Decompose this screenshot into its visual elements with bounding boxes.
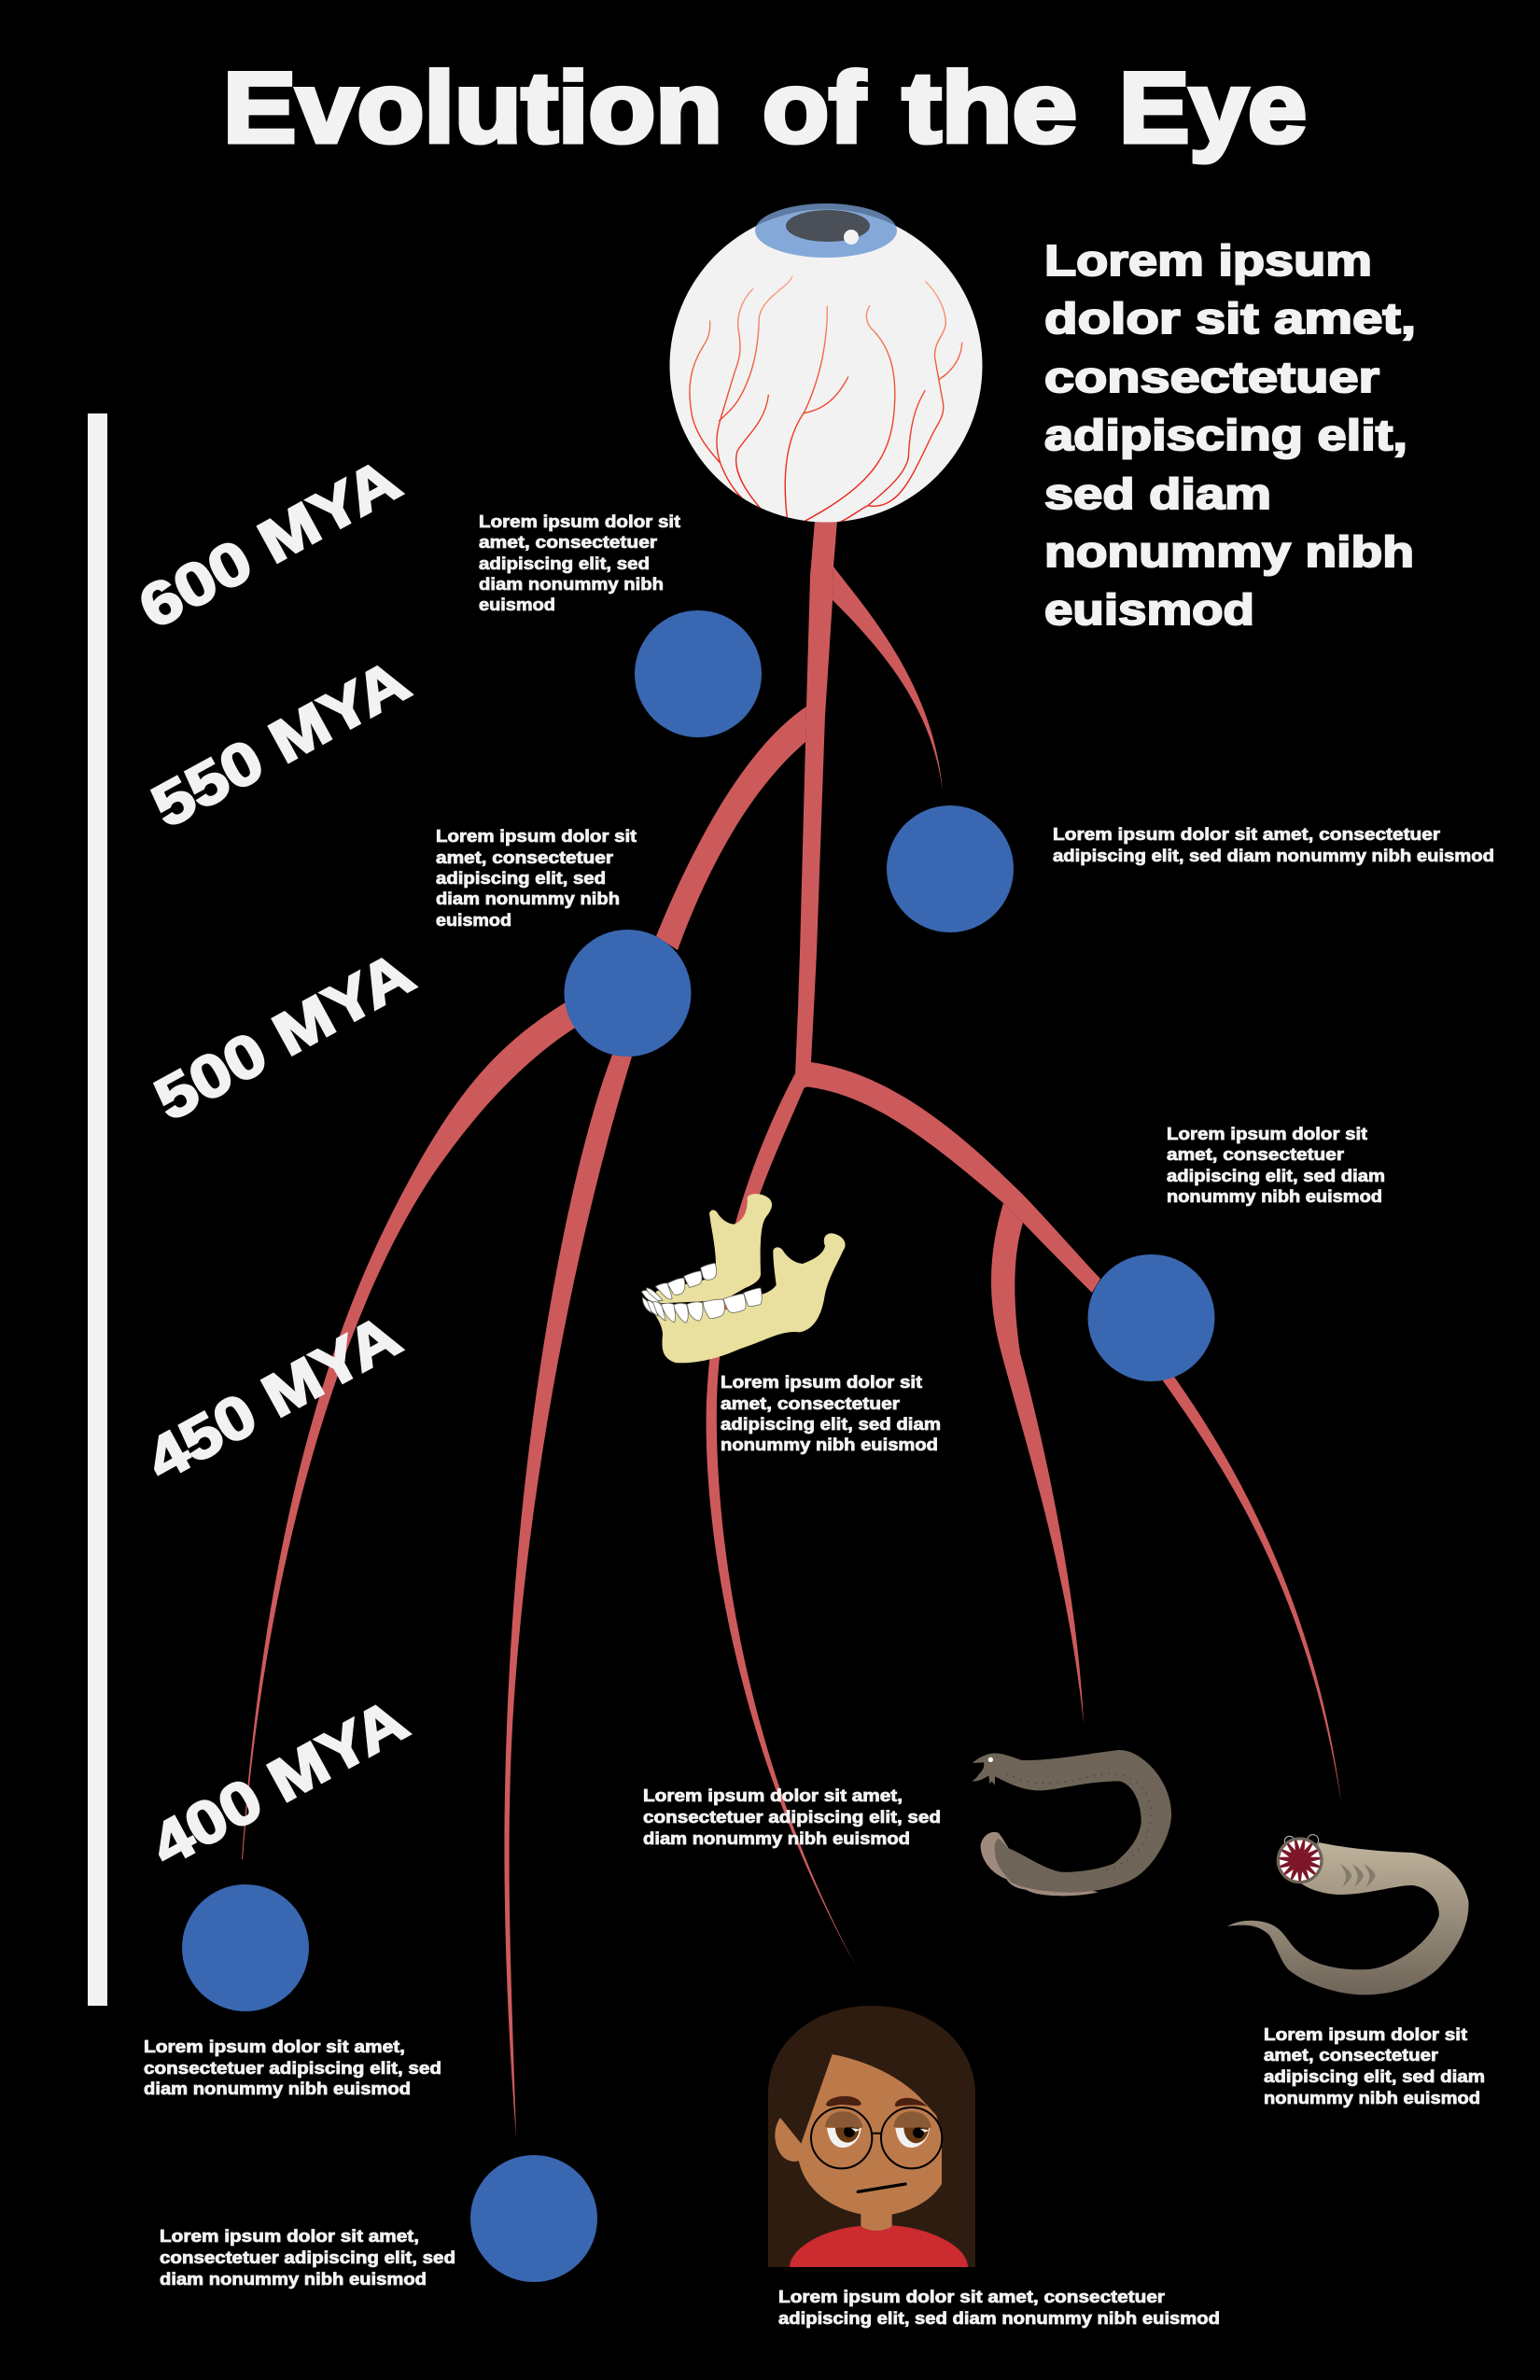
large description text: dolor sit amet, bbox=[1044, 294, 1416, 343]
branch: right limb bbox=[804, 1062, 1100, 1293]
text block: right node: adipiscing elit, sed diam bbox=[1167, 1166, 1385, 1185]
phylogenetic tree branches bbox=[242, 521, 1341, 2137]
upper jaw bbox=[653, 1194, 772, 1304]
text block: jaw: adipiscing elit, sed diam bbox=[721, 1414, 941, 1434]
text block: middle node: amet, consectetuer bbox=[436, 847, 613, 867]
text block: upper right node: Lorem ipsum dolor sit amet, consectetuer bbox=[1053, 824, 1440, 844]
title: of bbox=[763, 51, 865, 163]
hagfish slime pores bbox=[1007, 1773, 1151, 1870]
veins bbox=[690, 276, 962, 522]
branch glimpse between teeth bbox=[723, 1304, 728, 1310]
text block: beside human branch: Lorem ipsum dolor sit amet, bbox=[643, 1785, 903, 1805]
branch: down from middle node bbox=[504, 1055, 632, 2137]
node circles bbox=[182, 610, 1215, 2282]
text block: far left node: Lorem ipsum dolor sit amet, bbox=[144, 2037, 405, 2056]
right eye bbox=[893, 2111, 931, 2148]
large description text: nonummy nibh bbox=[1044, 527, 1414, 576]
text block: jaw: amet, consectetuer bbox=[721, 1393, 900, 1413]
shirt bbox=[790, 2225, 968, 2267]
text block: lamprey bbox=[1264, 2024, 1485, 2107]
icon: jaw bbox=[641, 1194, 846, 1363]
large description text bbox=[1044, 236, 1416, 634]
text block: beside human branch bbox=[643, 1785, 941, 1848]
text block: top node: euismod bbox=[479, 595, 555, 614]
hagfish body bbox=[973, 1750, 1171, 1893]
text block: middle node: diam nonummy nibh bbox=[436, 889, 620, 908]
text block: middle node: euismod bbox=[436, 910, 511, 930]
highlight bbox=[844, 230, 859, 245]
text block: human: Lorem ipsum dolor sit amet, consectetuer bbox=[778, 2287, 1165, 2306]
text block: far left node bbox=[144, 2037, 441, 2098]
lamprey sensory arcs bbox=[1284, 1835, 1319, 1846]
icon: hagfish bbox=[973, 1750, 1171, 1896]
hagfish eye bbox=[988, 1757, 993, 1762]
label: 450 MYA: 450 MYA bbox=[135, 1301, 411, 1493]
iris bbox=[755, 209, 897, 258]
text block: human: adipiscing elit, sed diam nonummy nibh euismod bbox=[778, 2308, 1220, 2328]
mouth bbox=[858, 2184, 905, 2191]
large description text: consectetuer bbox=[1044, 353, 1379, 401]
text block: human bbox=[778, 2287, 1220, 2328]
main trunk bbox=[795, 521, 837, 1088]
text block: jaw: Lorem ipsum dolor sit bbox=[721, 1372, 922, 1392]
text block: upper right node: adipiscing elit, sed diam nonummy nibh euismod bbox=[1053, 846, 1494, 865]
branch: to hagfish bbox=[991, 1203, 1084, 1724]
title: the bbox=[903, 51, 1077, 163]
hair bbox=[768, 2006, 975, 2267]
lamprey gills bbox=[1340, 1864, 1376, 1887]
text block: lamprey: amet, consectetuer bbox=[1264, 2045, 1438, 2065]
eye outer cornea bbox=[755, 203, 897, 258]
branch: upper right bbox=[833, 567, 943, 791]
text block: middle node bbox=[436, 826, 637, 930]
large description text: euismod bbox=[1044, 585, 1254, 634]
title: Evolution bbox=[223, 51, 722, 163]
text block: upper right node bbox=[1053, 824, 1494, 865]
icon: eyeball bbox=[670, 203, 982, 523]
text block: beside human branch: consectetuer adipiscing elit, sed bbox=[643, 1807, 941, 1827]
text block: jaw: nonummy nibh euismod bbox=[721, 1435, 938, 1454]
text block: top node: amet, consectetuer bbox=[479, 532, 657, 552]
text block: bottom left node: diam nonummy nibh euismod bbox=[160, 2269, 427, 2289]
eyebrows bbox=[826, 2096, 927, 2107]
icon: human portrait bbox=[768, 2006, 975, 2267]
text block: right node: amet, consectetuer bbox=[1167, 1144, 1344, 1164]
text block: middle node: Lorem ipsum dolor sit bbox=[436, 826, 637, 846]
time labels bbox=[128, 445, 424, 1879]
text block: lamprey: adipiscing elit, sed diam bbox=[1264, 2066, 1485, 2086]
glasses bbox=[811, 2107, 942, 2168]
text block: far left node: diam nonummy nibh euismod bbox=[144, 2079, 411, 2098]
text block: beside human branch: diam nonummy nibh euismod bbox=[643, 1828, 910, 1848]
text block: bottom left node: Lorem ipsum dolor sit amet, bbox=[160, 2226, 419, 2246]
label: 500 MYA: 500 MYA bbox=[144, 939, 424, 1133]
face bbox=[798, 2054, 942, 2216]
text block: top node bbox=[479, 511, 680, 614]
text block: lamprey: nonummy nibh euismod bbox=[1264, 2088, 1480, 2107]
title: Eye bbox=[1119, 51, 1307, 163]
text block: top node: diam nonummy nibh bbox=[479, 574, 664, 594]
lamprey body bbox=[1227, 1842, 1468, 1995]
label: 400 MYA: 400 MYA bbox=[140, 1686, 418, 1879]
large description text: adipiscing elit, bbox=[1044, 411, 1407, 459]
text block: right node: nonummy nibh euismod bbox=[1167, 1186, 1382, 1206]
timeline bar bbox=[88, 413, 107, 2006]
text block: middle node: adipiscing elit, sed bbox=[436, 868, 606, 888]
branch: to human bbox=[707, 1073, 858, 1969]
text block: top node: adipiscing elit, sed bbox=[479, 553, 650, 573]
text block: jaw bbox=[721, 1372, 941, 1454]
text block: far left node: consectetuer adipiscing elit, sed bbox=[144, 2058, 441, 2078]
branch: to middle-left node bbox=[656, 707, 806, 950]
icon: lamprey bbox=[1227, 1835, 1468, 1995]
text block: lamprey: Lorem ipsum dolor sit bbox=[1264, 2024, 1467, 2044]
text block: top node: Lorem ipsum dolor sit bbox=[479, 511, 680, 531]
branch: to lamprey bbox=[1162, 1377, 1341, 1802]
large description text: Lorem ipsum bbox=[1044, 236, 1372, 285]
ear bbox=[775, 2118, 801, 2162]
lower jaw bbox=[655, 1233, 846, 1363]
teeth bbox=[641, 1263, 762, 1323]
text block: bottom left node: consectetuer adipiscing elit, sed bbox=[160, 2247, 455, 2267]
hagfish tail fin bbox=[981, 1832, 1099, 1896]
lamprey mouth bbox=[1277, 1837, 1323, 1883]
title bbox=[223, 51, 1307, 163]
text block: right node bbox=[1167, 1124, 1385, 1206]
pupil bbox=[786, 210, 870, 242]
sclera bbox=[670, 209, 982, 523]
label: 600 MYA: 600 MYA bbox=[128, 445, 411, 641]
text block: bottom left node bbox=[160, 2226, 455, 2289]
text block: right node: Lorem ipsum dolor sit bbox=[1167, 1124, 1367, 1143]
large description text: sed diam bbox=[1044, 469, 1271, 518]
left eye bbox=[825, 2111, 862, 2148]
branch: far left bbox=[242, 1002, 577, 1859]
label: 550 MYA: 550 MYA bbox=[141, 647, 420, 840]
neck bbox=[861, 2205, 892, 2231]
